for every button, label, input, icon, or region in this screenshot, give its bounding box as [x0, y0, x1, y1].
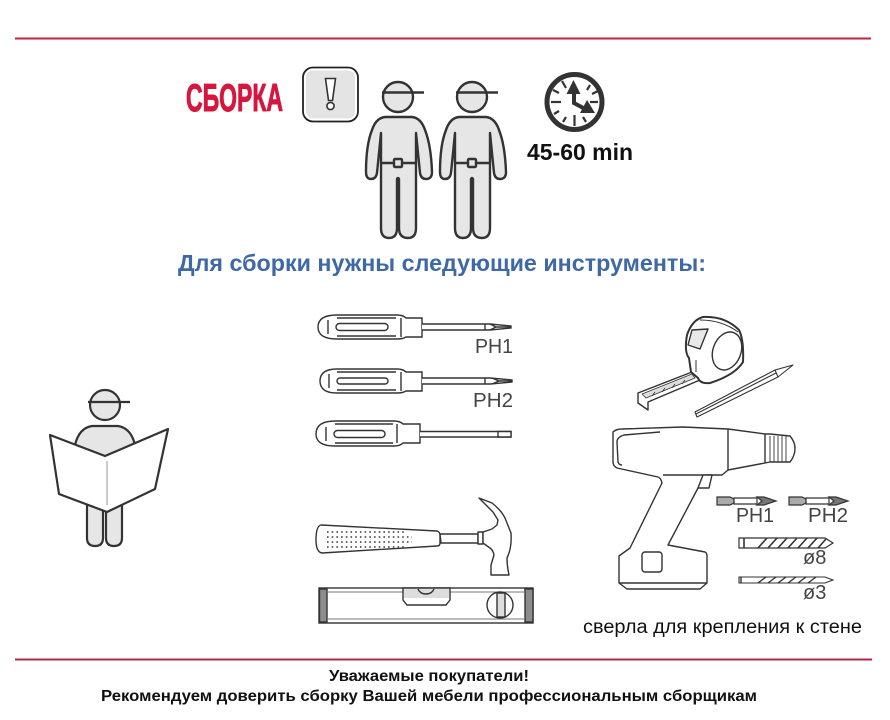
label: PH2: PH2: [473, 390, 513, 412]
icon: screwdriver PH1: [318, 315, 511, 339]
label: PH2 bit: PH2: [808, 505, 848, 527]
footer notice: Рекомендуем доверить сборку Вашей мебели профессиональным сборщикам: [101, 688, 757, 705]
footer notice: [101, 668, 757, 705]
icon: second worker: [440, 82, 506, 238]
icon: tape measure: [638, 317, 747, 410]
icon: 3 mm drill bit: [739, 577, 833, 583]
icon: warning exclamation box: [303, 68, 358, 122]
icon: first worker: [366, 82, 432, 238]
icon: spirit level: [319, 588, 533, 623]
icon: 8 mm drill bit: [739, 538, 833, 548]
footer notice: Уважаемые покупатели!: [329, 668, 529, 685]
label: 8 mm: ø8: [803, 547, 826, 569]
icon: cordless drill: [613, 427, 795, 589]
icon: worker reading manual: [50, 390, 168, 546]
icon: pencil: [695, 365, 793, 417]
icon: PH1 bit: [717, 497, 776, 505]
icon: clock: [547, 74, 602, 130]
icon: claw hammer: [316, 498, 511, 575]
label: 3 mm: ø3: [803, 582, 826, 604]
icon: flat screwdriver: [316, 421, 511, 446]
label: PH1 bit: PH1: [736, 505, 774, 527]
icon: screwdriver PH2: [320, 369, 512, 393]
icon: PH2 bit: [789, 497, 848, 505]
duration label: 45-60 min: [527, 139, 633, 165]
caption: wall mounting bits: сверла для крепления к стене: [583, 617, 862, 638]
label: PH1: PH1: [475, 336, 513, 358]
heading: required tools: Для сборки нужны следующие инструменты:: [178, 250, 706, 276]
title: assembly: СБОРКА: [186, 77, 283, 120]
